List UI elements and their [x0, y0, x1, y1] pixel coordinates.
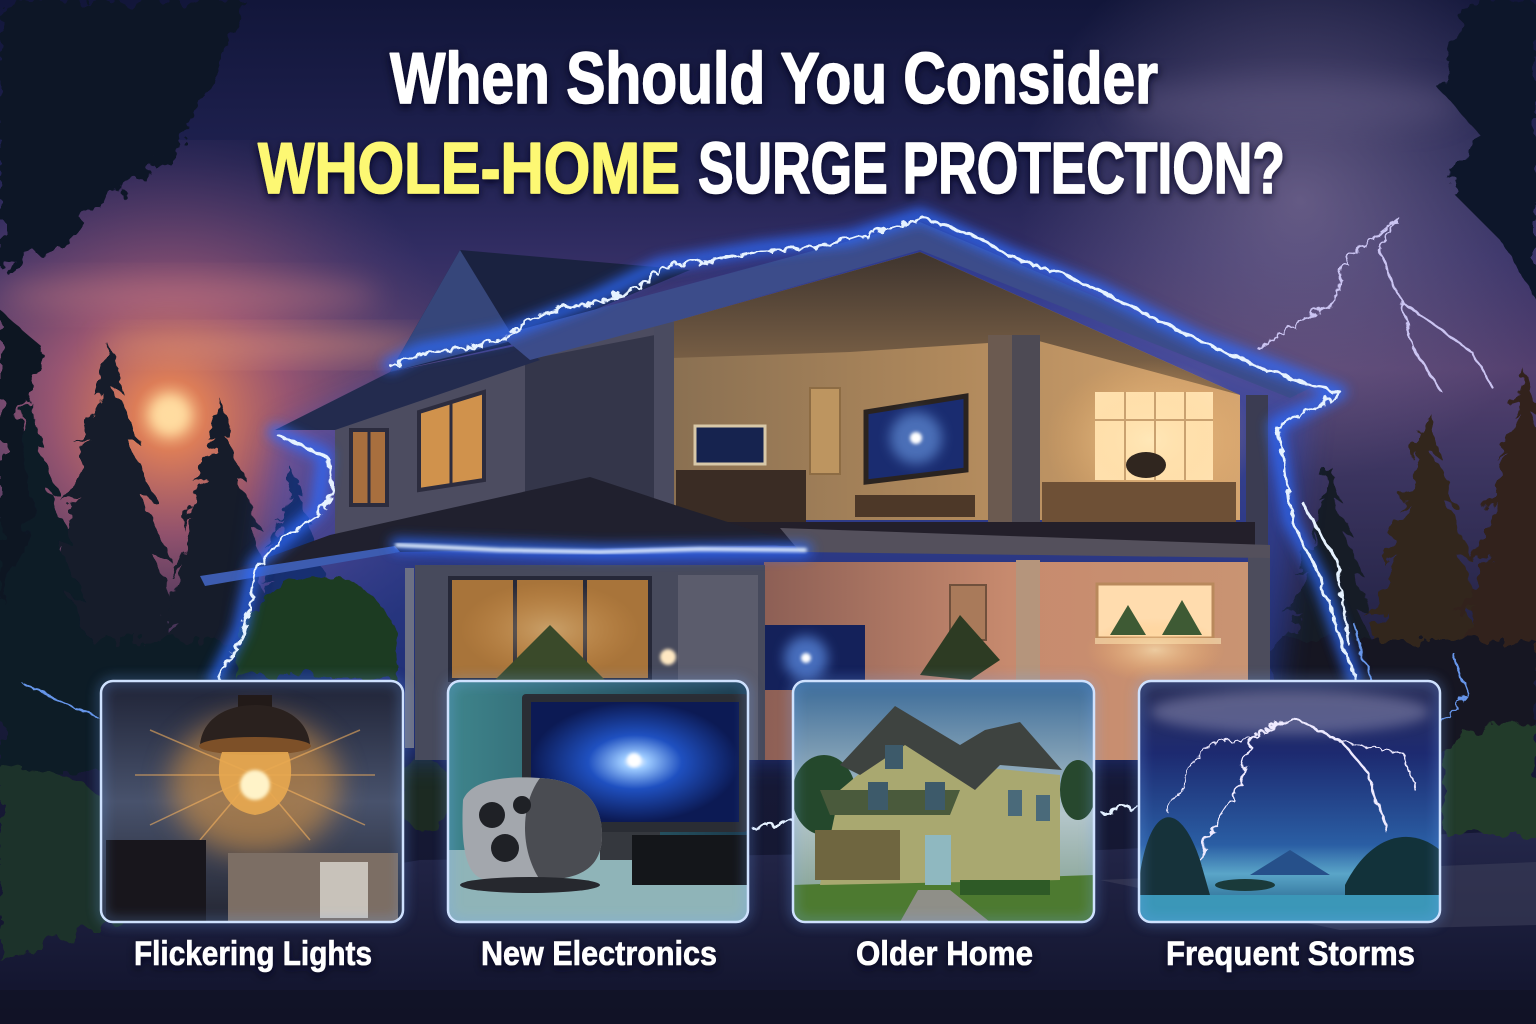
- card label: New Electronics: [481, 935, 717, 973]
- title line 2 remainder: SURGE PROTECTION?: [698, 129, 1285, 209]
- outer glow: [215, 215, 1355, 680]
- card image: old house: [792, 681, 1096, 922]
- indoor plants: [920, 615, 1000, 680]
- card label: Flickering Lights: [134, 935, 372, 973]
- lower roof: [205, 477, 800, 580]
- lower left wall: [415, 565, 765, 760]
- shrubs: [0, 725, 1536, 960]
- card: new electronics: [448, 681, 748, 973]
- kitchen counter: [1042, 482, 1236, 540]
- lightning halo behind house: [230, 222, 1310, 760]
- upper columns: [654, 322, 674, 522]
- small sparks: [20, 620, 1465, 720]
- card frame: [101, 681, 403, 922]
- upper interior room: [672, 252, 1240, 520]
- card: older home: [792, 681, 1096, 973]
- main roof: [500, 222, 1310, 398]
- card frame: [793, 681, 1094, 922]
- card: frequent storms: [1139, 681, 1440, 973]
- card frame: [448, 681, 748, 922]
- left gable roof: [390, 250, 690, 372]
- upper left wall: [335, 325, 660, 538]
- kitchen window: [1095, 392, 1213, 480]
- TV console: [855, 495, 975, 517]
- floor slab: [600, 522, 1255, 546]
- title: [258, 39, 1285, 209]
- upper windows: [351, 430, 387, 505]
- sky bolt right: [1255, 215, 1490, 390]
- card image: light bulb: [101, 681, 403, 922]
- lower rooms: [764, 562, 1254, 760]
- bright core: [215, 215, 1355, 825]
- card: flickering lights: [101, 681, 403, 973]
- gutter line: [397, 545, 805, 552]
- lower window: [450, 578, 650, 680]
- wall TV: [866, 396, 966, 482]
- ground and road: [0, 830, 1536, 1024]
- trees: left and right forest: [0, 0, 1536, 770]
- card label: Frequent Storms: [1166, 935, 1415, 973]
- card image: lightning over lake: [1139, 681, 1440, 922]
- title highlight: whole-home: WHOLE-HOME: [258, 129, 680, 209]
- card label: Older Home: [856, 935, 1033, 973]
- card frame: [1139, 681, 1440, 922]
- title line 1: When Should You Consider: [390, 39, 1158, 119]
- card image: TV and speaker: [448, 681, 748, 922]
- house: [200, 222, 1310, 761]
- lightning around house: [20, 215, 1490, 825]
- left side room furniture: [676, 470, 806, 522]
- garden shrub: [232, 575, 396, 678]
